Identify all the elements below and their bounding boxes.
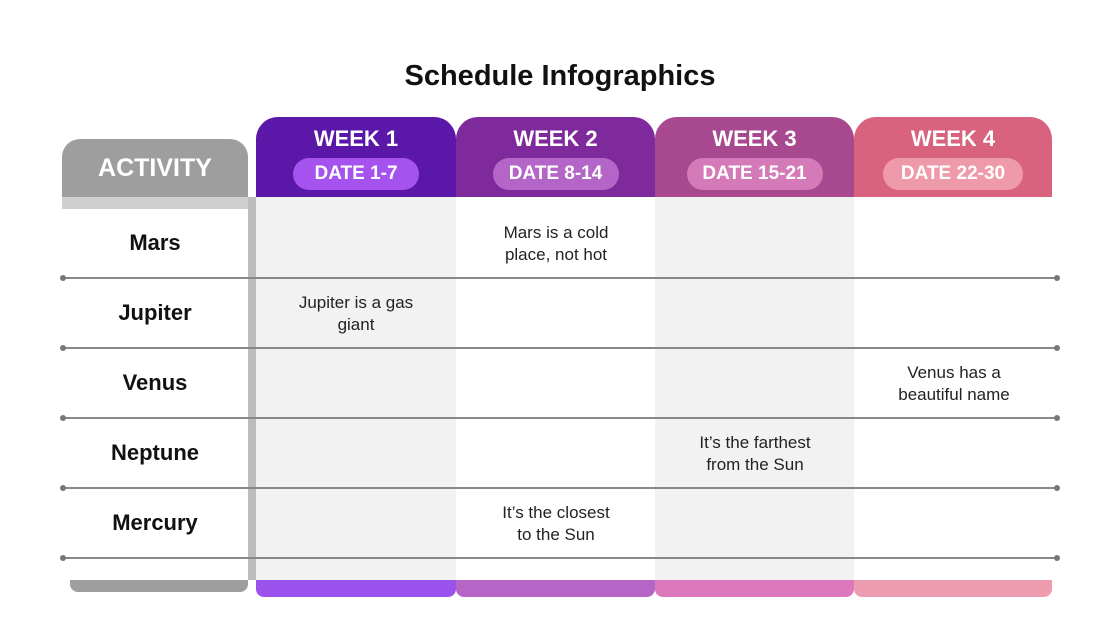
cell: Mars week 2: place, not hot bbox=[505, 245, 607, 264]
header: week 3: WEEK 3 bbox=[712, 126, 797, 151]
header: week 2: DATE 8-14 bbox=[509, 163, 602, 184]
row label: Mars: Mars bbox=[129, 230, 181, 255]
row label: Jupiter: Jupiter bbox=[118, 300, 192, 325]
header: week 1 bbox=[256, 117, 456, 197]
cell: Jupiter week 1: giant bbox=[338, 315, 374, 334]
row label: Venus: Venus bbox=[123, 370, 187, 395]
cell: Mercury week 2: It’s the closest bbox=[502, 503, 610, 522]
title: Schedule Infographics bbox=[404, 60, 716, 92]
cell: Mars week 2 bbox=[504, 223, 608, 264]
cell: Mercury week 2 bbox=[502, 503, 610, 544]
activity header: ACTIVITY bbox=[98, 154, 212, 182]
cell: Jupiter week 1: Jupiter is a gas bbox=[299, 293, 413, 312]
row label: Mercury: Mercury bbox=[112, 510, 198, 535]
cell: Jupiter week 1 bbox=[299, 293, 413, 334]
row label: Neptune: Neptune bbox=[111, 440, 199, 465]
header: week 3: DATE 15-21 bbox=[702, 163, 807, 184]
header: week 4: DATE 22-30 bbox=[901, 163, 1005, 184]
cell: Mercury week 2: to the Sun bbox=[517, 525, 595, 544]
header: week 4 bbox=[854, 117, 1052, 197]
cell: Venus week 4: Venus has a bbox=[907, 363, 1001, 382]
row lines bbox=[62, 277, 1058, 279]
header: week 2 bbox=[456, 117, 655, 197]
cell: Neptune week 3: from the Sun bbox=[706, 455, 804, 474]
vertical gray bar bbox=[248, 197, 256, 580]
header: week 3 bbox=[655, 117, 854, 197]
cell: Venus week 4 bbox=[898, 363, 1010, 404]
bottom bars bbox=[70, 580, 248, 592]
activity strip bbox=[62, 197, 248, 209]
cell: Venus week 4: beautiful name bbox=[898, 385, 1010, 404]
header: week 1: DATE 1-7 bbox=[314, 163, 398, 184]
cell: Neptune week 3: It’s the farthest bbox=[699, 433, 811, 452]
cell: Neptune week 3 bbox=[699, 433, 811, 474]
header: week 2: WEEK 2 bbox=[513, 126, 598, 151]
header: week 4: WEEK 4 bbox=[911, 126, 995, 151]
cell: Mars week 2: Mars is a cold bbox=[504, 223, 608, 242]
activity header bbox=[62, 139, 248, 197]
shaded column week 3 bbox=[655, 197, 854, 580]
shaded column week 1 bbox=[256, 197, 456, 580]
header: week 1: WEEK 1 bbox=[314, 126, 398, 151]
